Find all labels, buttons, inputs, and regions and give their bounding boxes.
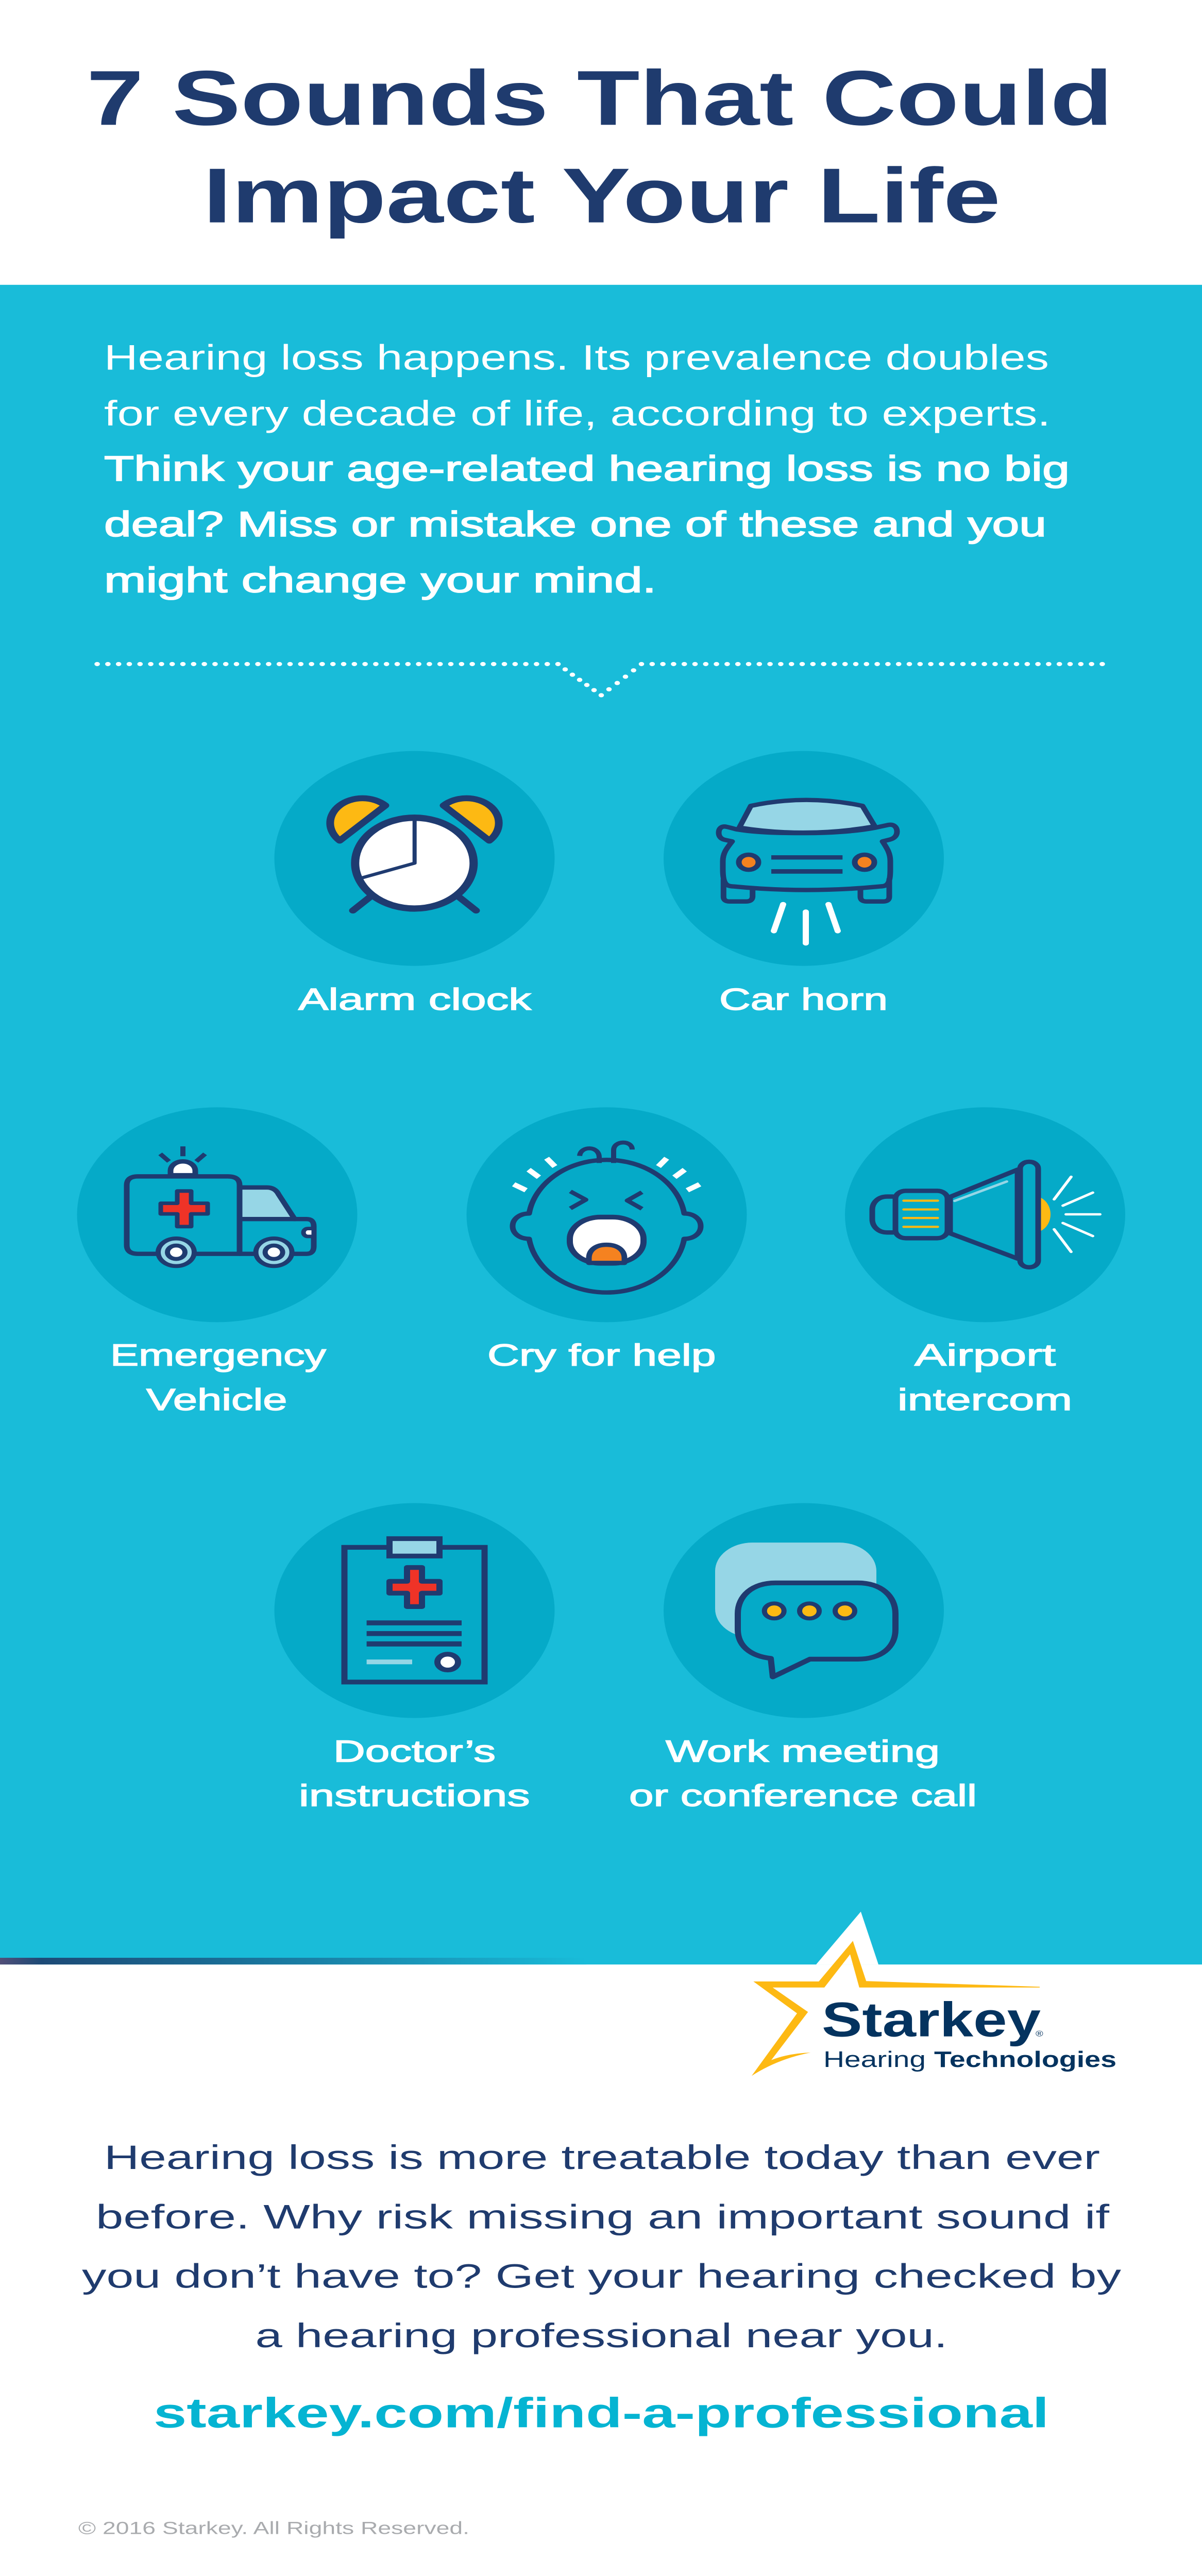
star outline [752,1941,1040,2076]
label: cry for help: Cry for help [487,1337,716,1372]
label: doctor's instructions: Doctor’s [333,1734,496,1769]
item: car horn [664,751,944,1016]
icon background circle [664,1503,944,1718]
icon background circle [845,1107,1125,1322]
tagline: Technologies [934,2046,1116,2072]
intro text [104,337,1070,600]
label: emergency vehicle: Vehicle [146,1382,287,1417]
icon background circle [664,751,944,966]
item: doctor's instructions [274,1503,554,1813]
closing text: you don’t have to? Get your hearing checked by [82,2258,1122,2295]
intro text: Think your age-related hearing loss is no big [104,448,1070,488]
title: Impact Your Life [203,152,1001,239]
intro text: Hearing loss happens. Its prevalence doubles [104,337,1049,377]
tagline [823,2046,1116,2072]
label: airport intercom: Airport [915,1337,1056,1372]
label: doctor's instructions [299,1734,530,1813]
label: work meeting: or conference call [629,1778,977,1813]
tagline: Hearing [823,2046,926,2072]
title: 7 Sounds That Could [87,55,1113,142]
star spike over band [816,1912,878,1964]
label: car horn: Car horn [719,982,888,1016]
item: alarm clock [274,751,554,1016]
icon: chat bubbles [715,1543,895,1677]
closing text [82,2139,1122,2355]
icon: megaphone [872,1162,1100,1267]
gradient strip [0,1958,586,1964]
dotted divider with chevron [96,664,1106,698]
closing text: before. Why risk missing an important sound if [96,2198,1110,2236]
title [87,55,1113,239]
label: doctor's instructions: instructions [299,1778,530,1813]
copyright: © 2016 Starkey. All Rights Reserved. [78,2519,469,2538]
item: emergency vehicle [77,1107,358,1417]
closing text: Hearing loss is more treatable today than ever [104,2139,1100,2177]
wordmark: Starkey [822,1993,1041,2047]
label: airport intercom [898,1337,1072,1417]
item: work meeting [629,1503,977,1813]
icon background circle [274,751,554,966]
item: cry for help [467,1107,747,1372]
label: airport intercom: intercom [898,1382,1072,1417]
intro text: might change your mind. [104,560,656,600]
icon background circle [77,1107,358,1322]
label: emergency vehicle: Emergency [110,1337,326,1372]
label: work meeting: Work meeting [666,1734,940,1769]
icon: alarm clock [330,798,499,910]
icon: clipboard [344,1539,484,1682]
icon background circle [467,1107,747,1322]
registered mark: ® [1036,2029,1043,2038]
icon: car [719,800,897,943]
icon: ambulance [127,1146,314,1266]
intro text: for every decade of life, according to experts. [104,393,1051,433]
logo: Starkey [752,1912,1116,2076]
icon background circle [274,1503,554,1718]
item: airport intercom [845,1107,1125,1417]
label: work meeting [629,1734,977,1813]
URL call to action: starkey.com/find-a-professional [154,2390,1049,2437]
label: emergency vehicle [110,1337,326,1417]
label: alarm clock: Alarm clock [298,982,531,1016]
intro text: deal? Miss or mistake one of these and you [104,504,1046,544]
closing text: a hearing professional near you. [256,2317,947,2355]
panel: teal band [0,285,1202,1964]
icon: crying baby [513,1143,701,1293]
